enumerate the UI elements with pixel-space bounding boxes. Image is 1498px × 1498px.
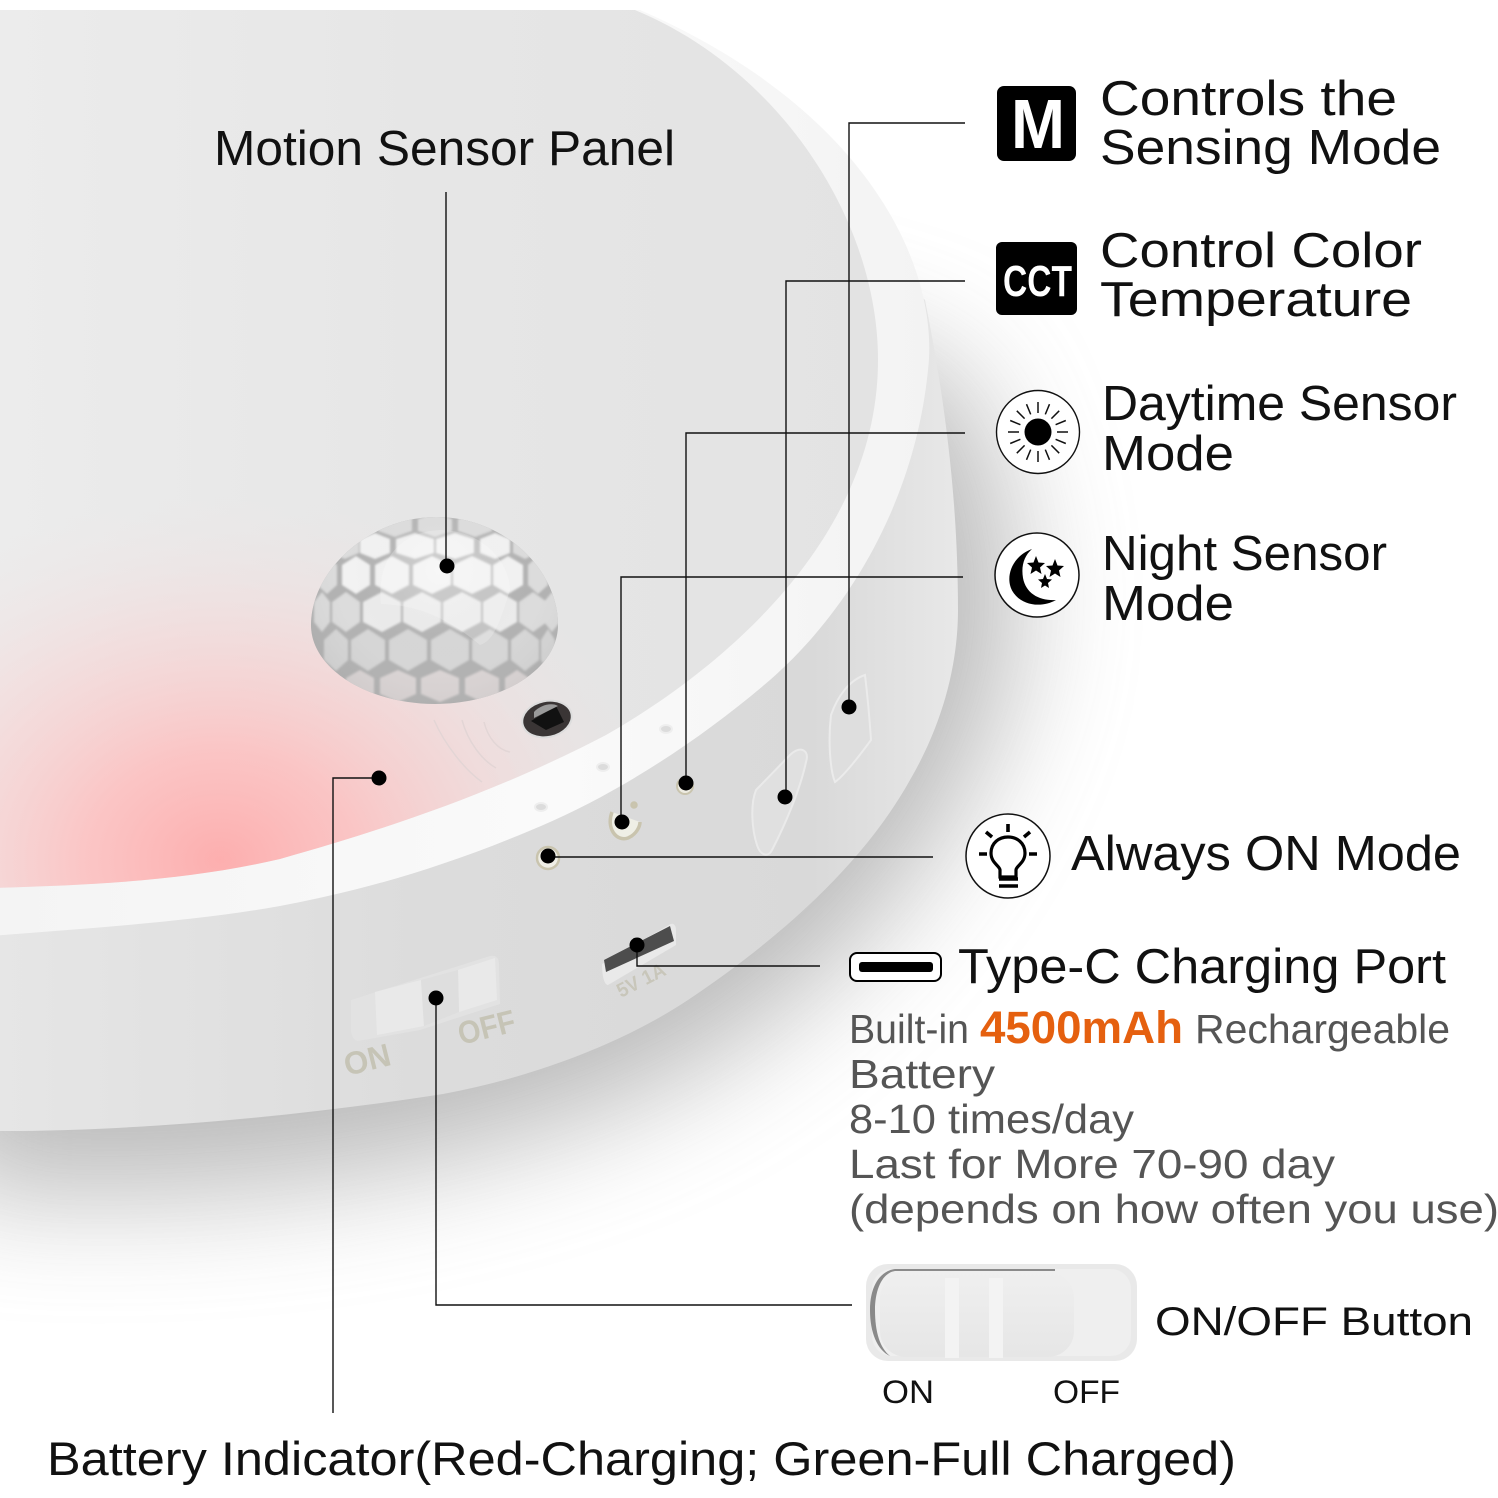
leader: always on xyxy=(548,856,933,858)
light sensor: black lens xyxy=(518,695,576,743)
indicator dots on ring xyxy=(535,725,672,811)
touch icon: day xyxy=(677,778,693,794)
icon: daytime sun xyxy=(996,390,1080,474)
label: night sensor mode xyxy=(1102,527,1387,631)
side wall xyxy=(0,10,958,1131)
battery description text: Battery xyxy=(849,1051,996,1097)
dome PIR sensor xyxy=(311,517,558,704)
ON/OFF slider on device: OFF xyxy=(454,1003,519,1052)
leader: Type-C xyxy=(637,945,820,966)
leader end dots xyxy=(372,558,856,1006)
top ring xyxy=(0,10,929,936)
red battery indicator glow xyxy=(0,606,508,888)
icon: Type-C port xyxy=(850,953,941,981)
side button: M xyxy=(830,675,871,782)
label: ON: ON xyxy=(882,1374,934,1410)
battery description text: Last for More 70-90 day xyxy=(849,1141,1336,1187)
leader: motion sensor panel xyxy=(445,192,447,566)
touch icon: always on xyxy=(537,847,559,869)
leader: daytime mode xyxy=(686,433,965,783)
leader: M button xyxy=(849,123,965,707)
label: daytime sensor mode xyxy=(1102,377,1457,481)
label: control color temperature: Control Color xyxy=(1100,224,1422,278)
battery description text xyxy=(849,1002,1498,1232)
ON/OFF slider on device: ON xyxy=(340,1036,394,1083)
ripple marks under sensor xyxy=(434,720,510,782)
side button: CCT xyxy=(752,750,807,855)
Type-C port on device xyxy=(602,924,676,1002)
device: round motion sensor light xyxy=(0,10,958,1131)
label: ON/OFF button: ON/OFF Button xyxy=(1155,1300,1473,1344)
label: always on mode: Always ON Mode xyxy=(1071,827,1461,881)
device drop shadow xyxy=(0,300,1014,1192)
battery description text: Rechargeable xyxy=(1195,1006,1450,1052)
leader: CCT button xyxy=(786,281,965,797)
battery description text: 4500mAh xyxy=(980,1002,1183,1053)
label: battery indicator: Battery Indicator(Red-Charging; Green-Full Charged) xyxy=(47,1432,1236,1485)
label: night sensor mode: Mode xyxy=(1102,577,1234,631)
battery description text: 8-10 times/day xyxy=(849,1096,1135,1142)
sensor panel surface xyxy=(0,10,878,888)
battery description text: Built-in xyxy=(849,1006,969,1052)
label: night sensor mode: Night Sensor xyxy=(1102,527,1387,581)
label: Type-C charging port: Type-C Charging Port xyxy=(958,940,1446,994)
icon: light bulb xyxy=(966,814,1050,898)
battery description text: (depends on how often you use) xyxy=(849,1186,1498,1232)
label: control color temperature xyxy=(1100,224,1422,327)
icon: CCT xyxy=(996,242,1077,315)
label: daytime sensor mode: Mode xyxy=(1102,427,1234,481)
label: control color temperature: Temperature xyxy=(1100,273,1412,327)
label: controls the sensing mode: Sensing Mode xyxy=(1100,121,1441,175)
heading: Motion Sensor Panel: Motion Sensor Panel xyxy=(214,122,675,176)
leader lines with dots xyxy=(333,123,965,1413)
ON/OFF slider on device xyxy=(340,956,519,1083)
ON/OFF switch illustration xyxy=(866,1264,1137,1361)
touch icon: night xyxy=(610,803,640,839)
icon: CCT: CCT xyxy=(1003,257,1072,306)
icon: M mode: M xyxy=(1011,85,1065,163)
icon: night moon xyxy=(995,533,1079,617)
leader: night mode xyxy=(621,577,963,822)
label: daytime sensor mode: Daytime Sensor xyxy=(1102,377,1457,431)
label: controls the sensing mode xyxy=(1100,72,1441,175)
label: controls the sensing mode: Controls the xyxy=(1100,72,1397,126)
Type-C port on device: 5V 1A xyxy=(613,959,670,1002)
leader: battery indicator xyxy=(333,778,379,1413)
leader: ON/OFF xyxy=(436,998,852,1305)
label: OFF: OFF xyxy=(1053,1374,1120,1410)
